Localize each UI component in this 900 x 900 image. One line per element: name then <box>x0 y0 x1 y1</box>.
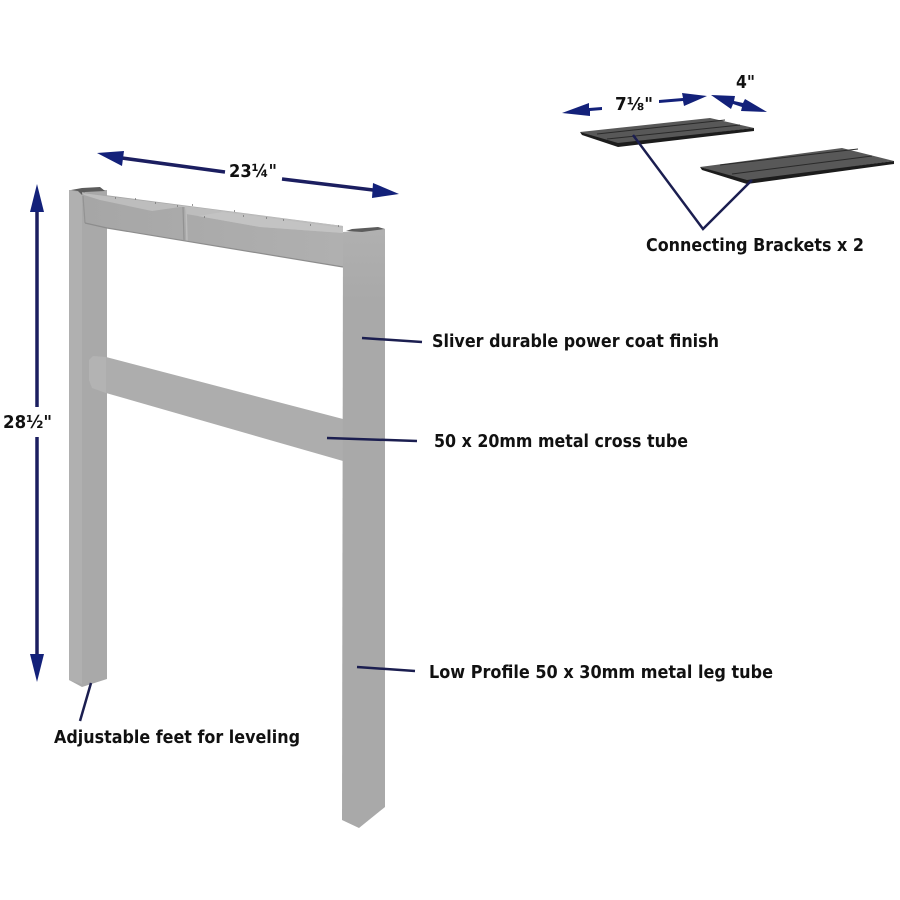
dimension arrow: width 23¼ <box>97 151 399 198</box>
label: cross tube: 50 x 20mm metal cross tube <box>434 431 688 452</box>
connecting bracket 1 <box>580 118 754 147</box>
right leg <box>342 227 385 828</box>
leader: feet <box>80 683 91 721</box>
label: 7⅛: 7⅛" <box>615 94 653 115</box>
label: 4: 4" <box>736 72 755 93</box>
label: 28½: 28½" <box>3 412 52 433</box>
leader: cross tube <box>327 438 417 441</box>
dimension arrow: height 28½ <box>30 184 44 682</box>
label: 23¼: 23¼" <box>229 161 277 182</box>
dimension arrow: 4 <box>711 95 767 112</box>
label: finish: Sliver durable power coat finish <box>432 331 719 352</box>
label: connecting brackets: Connecting Brackets x 2 <box>646 235 864 256</box>
dimension arrow: 7⅛ <box>562 93 707 116</box>
left leg <box>69 187 107 687</box>
bracket leader lines <box>633 135 752 229</box>
leader: finish <box>362 338 422 342</box>
label: leg tube: Low Profile 50 x 30mm metal leg tube <box>429 662 773 683</box>
leader: leg tube <box>357 667 415 671</box>
cross tube <box>89 356 343 461</box>
connecting bracket 2 <box>700 148 894 184</box>
label: feet: Adjustable feet for leveling <box>54 727 300 748</box>
top beam <box>82 192 343 267</box>
